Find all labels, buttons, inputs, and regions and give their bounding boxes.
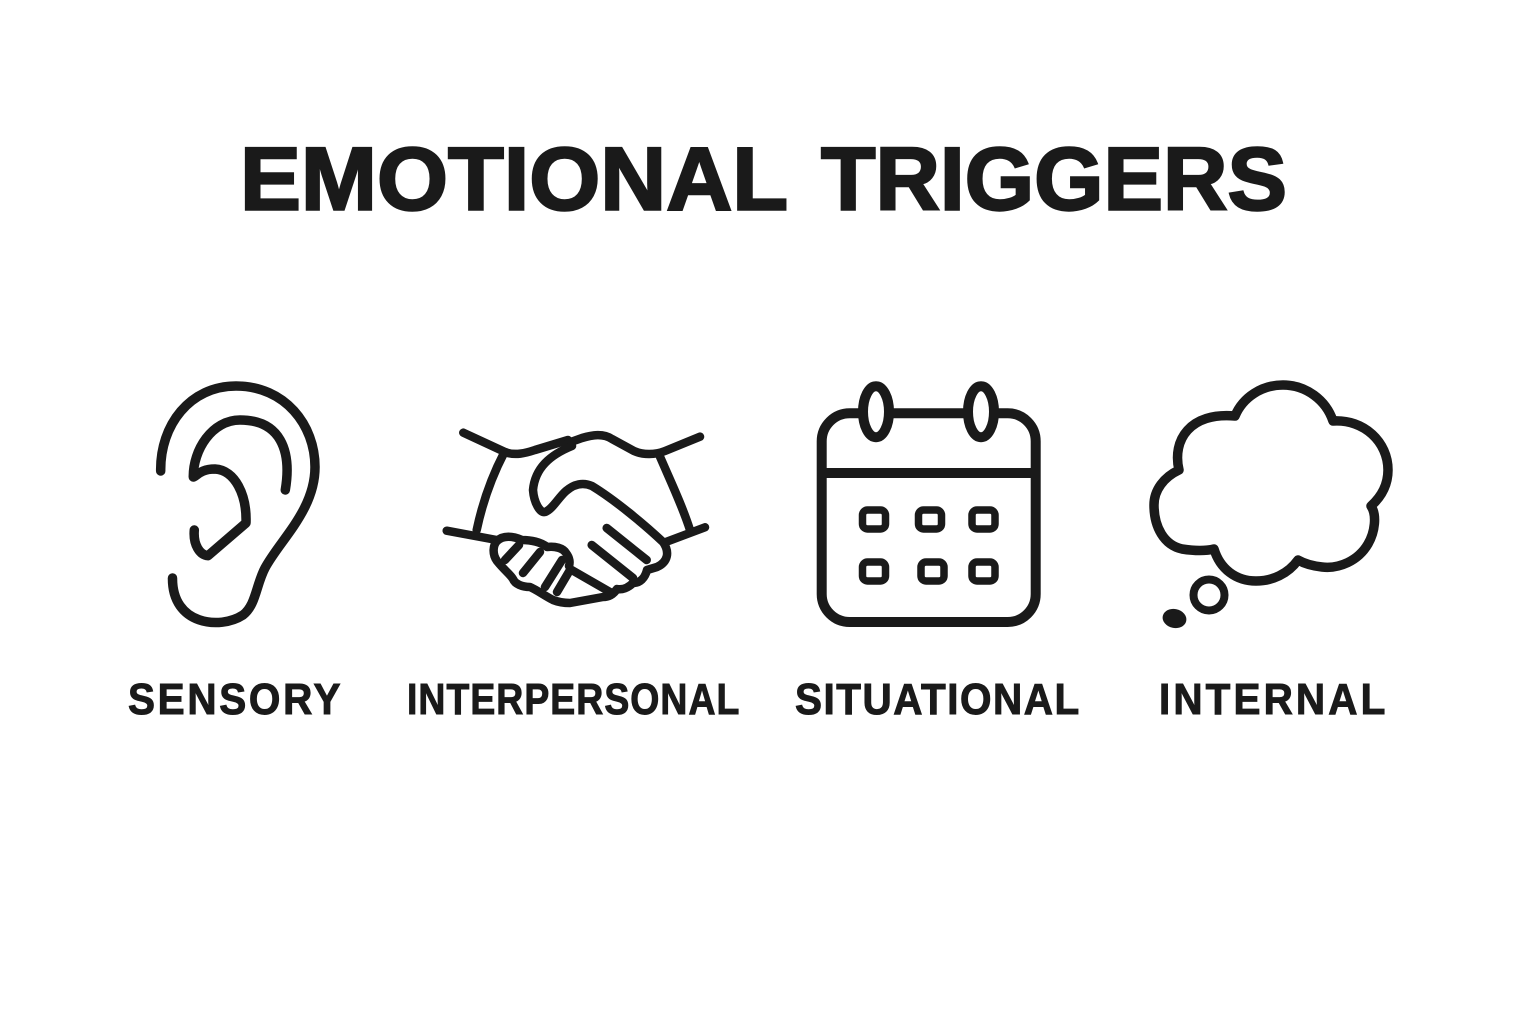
title bbox=[240, 128, 1287, 228]
icon: thought bubble bbox=[1154, 385, 1388, 630]
label: sensory: SENSORY bbox=[128, 674, 341, 723]
title: EMOTIONAL bbox=[240, 128, 788, 228]
label: interpersonal: INTERPERSONAL bbox=[407, 674, 739, 724]
label: situational: SITUATIONAL bbox=[795, 674, 1079, 723]
icon: handshake bbox=[447, 433, 705, 603]
binder ring left bbox=[863, 386, 889, 437]
icon: calendar bbox=[822, 386, 1036, 622]
binder ring right bbox=[968, 386, 994, 437]
title: TRIGGERS bbox=[821, 128, 1287, 228]
label: internal: INTERNAL bbox=[1159, 674, 1385, 723]
tiny bubble dot bbox=[1161, 607, 1188, 630]
date cells bbox=[862, 510, 995, 581]
small bubble ring bbox=[1194, 580, 1224, 610]
icon: ear bbox=[161, 386, 315, 623]
